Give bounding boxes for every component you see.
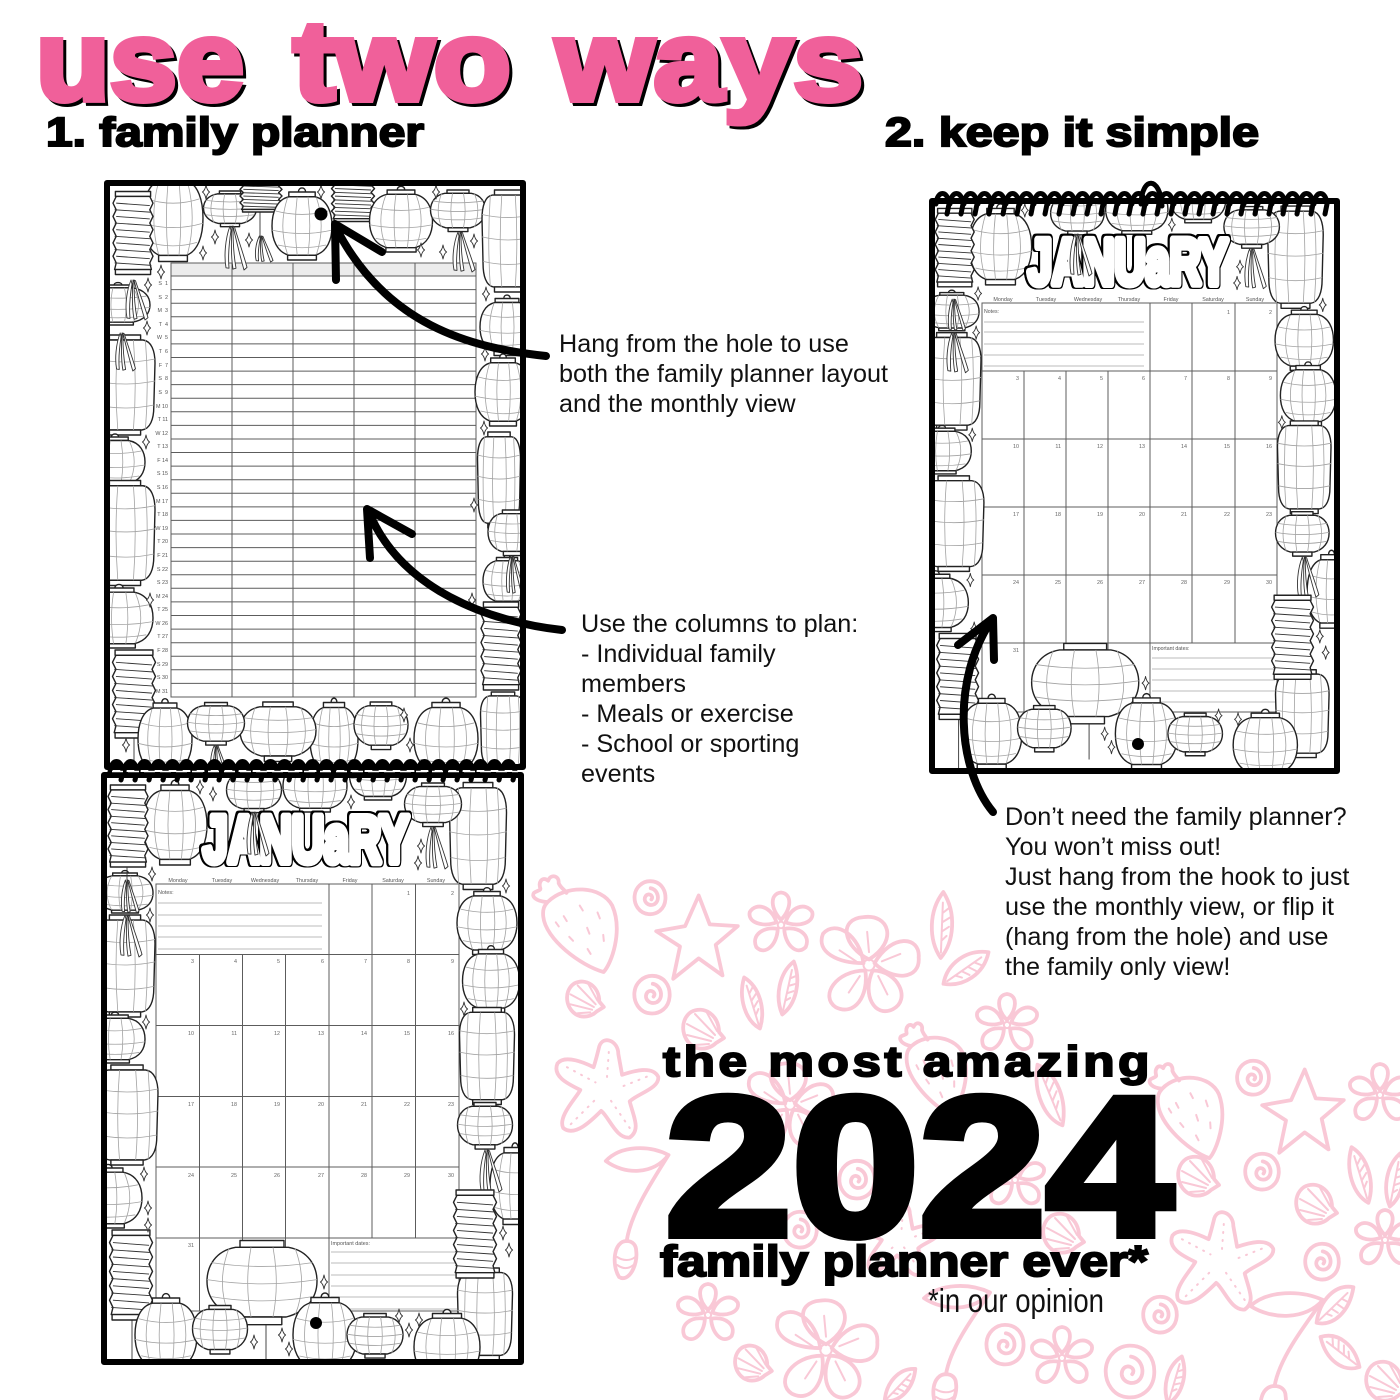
- planner day labels: S 29: [157, 662, 168, 668]
- calendar weekday headers: Monday: [168, 878, 188, 884]
- calendar dates: 10: [1013, 444, 1019, 450]
- calendar dates: 1: [407, 891, 410, 897]
- callout: use the columns: - School or sporting: [581, 730, 799, 758]
- tassel over month title: [247, 812, 269, 856]
- planner day labels: S 30: [157, 675, 168, 681]
- planner day labels: T 6: [159, 349, 168, 355]
- callout: hang from the hole: both the family planner layout: [559, 360, 888, 388]
- planner day labels: S 2: [158, 295, 168, 301]
- spiral binding and hook: [936, 183, 1327, 214]
- calendar weekday headers: Wednesday: [1074, 297, 1102, 303]
- planner day labels: W 19: [155, 526, 168, 532]
- notes box: [984, 309, 1144, 366]
- calendar dates: 23: [448, 1102, 454, 1108]
- calendar dates: [188, 891, 454, 1249]
- planner day labels: S 16: [157, 485, 168, 491]
- calendar dates: 23: [1266, 512, 1272, 518]
- callout: use the columns: - Meals or exercise: [581, 700, 794, 728]
- calendar dates: 25: [231, 1173, 237, 1179]
- calendar dates: 22: [404, 1102, 410, 1108]
- calendar dates: 3: [191, 959, 194, 965]
- title: ways: [555, 0, 863, 124]
- calendar dates: 9: [1269, 376, 1272, 382]
- planner day labels: T 27: [157, 634, 168, 640]
- calendar dates: 31: [1013, 648, 1019, 654]
- calendar dates: 21: [1181, 512, 1187, 518]
- calendar dates: 6: [321, 959, 324, 965]
- calendar dates: 7: [1184, 376, 1187, 382]
- notes box: Notes:: [984, 309, 999, 315]
- calendar dates: 9: [451, 959, 454, 965]
- icon: hanging hole: [1132, 738, 1144, 750]
- calendar dates: 27: [318, 1173, 324, 1179]
- calendar dates: [1013, 310, 1272, 654]
- calendar dates: 26: [1097, 580, 1103, 586]
- calendar weekday headers: Sunday: [1246, 297, 1264, 303]
- calendar dates: 10: [188, 1031, 194, 1037]
- callout: use the columns: events: [581, 760, 655, 788]
- panel: family planner layout: [85, 169, 536, 775]
- calendar dates: 26: [274, 1173, 280, 1179]
- calendar dates: 12: [274, 1031, 280, 1037]
- important dates box: Important dates:: [331, 1241, 370, 1247]
- title: use: [36, 0, 244, 124]
- calendar dates: 19: [1097, 512, 1103, 518]
- calendar dates: 18: [1055, 512, 1061, 518]
- planner day labels: S 8: [158, 376, 168, 382]
- calendar dates: 13: [318, 1031, 324, 1037]
- calendar dates: 29: [1224, 580, 1230, 586]
- calendar dates: 24: [1013, 580, 1019, 586]
- planner day labels: M 10: [156, 404, 168, 410]
- planner day labels: F 21: [157, 553, 168, 559]
- planner day labels: M 3: [158, 308, 168, 314]
- calendar frame: [932, 201, 1337, 771]
- tagline: family planner ever: family planner ever*: [660, 1237, 1149, 1286]
- callout: don't need the family planner: Don’t need the family planner?: [1005, 803, 1347, 831]
- notes box: [158, 890, 322, 949]
- planner day labels: W 5: [157, 335, 168, 341]
- calendar dates: 17: [1013, 512, 1019, 518]
- planner day labels: S 23: [157, 580, 168, 586]
- callout: don't need the family planner: use the monthly view, or flip it: [1005, 893, 1334, 921]
- calendar weekday headers: [993, 297, 1264, 303]
- calendar dates: 22: [1224, 512, 1230, 518]
- calendar dates: 5: [1100, 376, 1103, 382]
- panel: simple monthly view: [929, 180, 1340, 774]
- month title: January: JANUaRY: [203, 802, 409, 876]
- calendar dates: 27: [1139, 580, 1145, 586]
- calendar dates: 3: [1016, 376, 1019, 382]
- planner day labels: T 11: [158, 417, 168, 423]
- calendar dates: 1: [1227, 310, 1230, 316]
- footnote: *in our opinion: [928, 1282, 1104, 1319]
- planner day labels: W 26: [155, 621, 168, 627]
- important dates box: [331, 1241, 457, 1309]
- title: two: [293, 0, 511, 124]
- calendar dates: 5: [277, 959, 280, 965]
- calendar dates: 15: [404, 1031, 410, 1037]
- heading: keep it simple: 2. keep it simple: [885, 109, 1259, 155]
- planner day labels: F 28: [157, 648, 168, 654]
- calendar dates: 11: [1055, 444, 1061, 450]
- callout: don't need the family planner: the family only view!: [1005, 953, 1230, 981]
- planner day labels: M 24: [156, 594, 168, 600]
- calendar dates: 25: [1055, 580, 1061, 586]
- calendar grid: [982, 303, 1277, 712]
- callout: hang from the hole: and the monthly view: [559, 390, 796, 418]
- calendar dates: 4: [234, 959, 237, 965]
- calendar dates: 20: [1139, 512, 1145, 518]
- calendar weekday headers: Friday: [1164, 297, 1179, 303]
- callout: use the columns: members: [581, 670, 686, 698]
- calendar dates: 29: [404, 1173, 410, 1179]
- calendar dates: 8: [1227, 376, 1230, 382]
- calendar dates: 4: [1058, 376, 1061, 382]
- callout: don't need the family planner: (hang from the hole) and use: [1005, 923, 1328, 951]
- icon: hanging hole: [314, 208, 328, 220]
- calendar dates: 16: [448, 1031, 454, 1037]
- calendar dates: 19: [274, 1102, 280, 1108]
- important dates box: [1152, 646, 1275, 702]
- planner day labels: S 15: [157, 471, 168, 477]
- planner day labels: T 18: [157, 512, 168, 518]
- calendar dates: 6: [1142, 376, 1145, 382]
- calendar weekday headers: Friday: [343, 878, 358, 884]
- calendar weekday headers: Thursday: [1118, 297, 1141, 303]
- icon: hanging hole: [310, 1317, 322, 1329]
- panel: monthly view with family planner attached: [101, 759, 524, 1365]
- calendar dates: 15: [1224, 444, 1230, 450]
- planner day labels: T 20: [157, 539, 168, 545]
- title: [36, 0, 863, 124]
- tagline: 2024: 2024: [665, 1056, 1173, 1277]
- arrow: to the hook: [958, 618, 994, 812]
- calendar dates: 17: [188, 1102, 194, 1108]
- calendar weekday headers: Sunday: [427, 878, 445, 884]
- calendar dates: 13: [1139, 444, 1145, 450]
- calendar dates: 14: [1181, 444, 1187, 450]
- calendar weekday headers: Wednesday: [251, 878, 279, 884]
- planner day labels: W 12: [155, 431, 168, 437]
- heading: family planner: 1. family planner: [46, 109, 424, 155]
- background: pink line-art pattern: [532, 870, 1400, 1400]
- callout: hang from the hole: Hang from the hole to use: [559, 330, 849, 358]
- planner table: [171, 263, 476, 697]
- callout: don't need the family planner: You won’t miss out!: [1005, 833, 1221, 861]
- spiral binding: [110, 762, 515, 780]
- planner day labels: T 4: [159, 322, 168, 328]
- planner frame: [107, 183, 523, 767]
- notes box: Notes:: [158, 890, 174, 896]
- calendar dates: 30: [448, 1173, 454, 1179]
- callout: don't need the family planner: Just hang from the hook to just: [1005, 863, 1349, 891]
- planner day labels: S 1: [158, 281, 168, 287]
- calendar weekday headers: Thursday: [296, 878, 319, 884]
- calendar dates: 14: [361, 1031, 367, 1037]
- calendar dates: 24: [188, 1173, 194, 1179]
- calendar dates: 2: [451, 891, 454, 897]
- calendar dates: 12: [1097, 444, 1103, 450]
- planner lantern border: [85, 169, 536, 775]
- arrow: to the columns: [367, 509, 562, 630]
- tagline: the most amazing: the most amazing: [663, 1038, 1153, 1086]
- calendar grid: [156, 884, 459, 1311]
- planner day labels: [155, 281, 168, 695]
- callout: use the columns: Use the columns to plan:: [581, 610, 858, 638]
- planner day labels: M 17: [156, 499, 168, 505]
- planner day labels: S 22: [157, 567, 168, 573]
- arrow: to the hole: [335, 224, 546, 356]
- calendar dates: 28: [361, 1173, 367, 1179]
- calendar dates: 20: [318, 1102, 324, 1108]
- calendar weekday headers: Tuesday: [1036, 297, 1057, 303]
- planner day labels: F 14: [157, 458, 168, 464]
- calendar dates: 28: [1181, 580, 1187, 586]
- planner day labels: T 13: [157, 444, 168, 450]
- important dates box: Important dates:: [1152, 646, 1190, 652]
- lantern border: [74, 747, 540, 1380]
- calendar dates: 8: [407, 959, 410, 965]
- calendar dates: 2: [1269, 310, 1272, 316]
- planner day labels: T 25: [157, 607, 168, 613]
- month title: January: JANUaRY: [1028, 226, 1228, 298]
- planner day labels: S 9: [158, 390, 168, 396]
- calendar dates: 31: [188, 1243, 194, 1249]
- calendar weekday headers: Tuesday: [212, 878, 233, 884]
- calendar dates: 16: [1266, 444, 1272, 450]
- calendar weekday headers: Saturday: [382, 878, 404, 884]
- calendar weekday headers: [168, 878, 445, 884]
- calendar dates: 11: [231, 1031, 237, 1037]
- planner day labels: M 31: [156, 689, 168, 695]
- calendar weekday headers: Monday: [993, 297, 1013, 303]
- calendar weekday headers: Saturday: [1202, 297, 1224, 303]
- calendar frame: [104, 775, 521, 1362]
- tassel over month title: [1070, 234, 1092, 276]
- calendar dates: 7: [364, 959, 367, 965]
- calendar dates: 30: [1266, 580, 1272, 586]
- calendar dates: 21: [361, 1102, 367, 1108]
- calendar dates: 18: [231, 1102, 237, 1108]
- planner day labels: F 7: [159, 363, 168, 369]
- callout: use the columns: - Individual family: [581, 640, 776, 668]
- lantern border: [902, 172, 1356, 777]
